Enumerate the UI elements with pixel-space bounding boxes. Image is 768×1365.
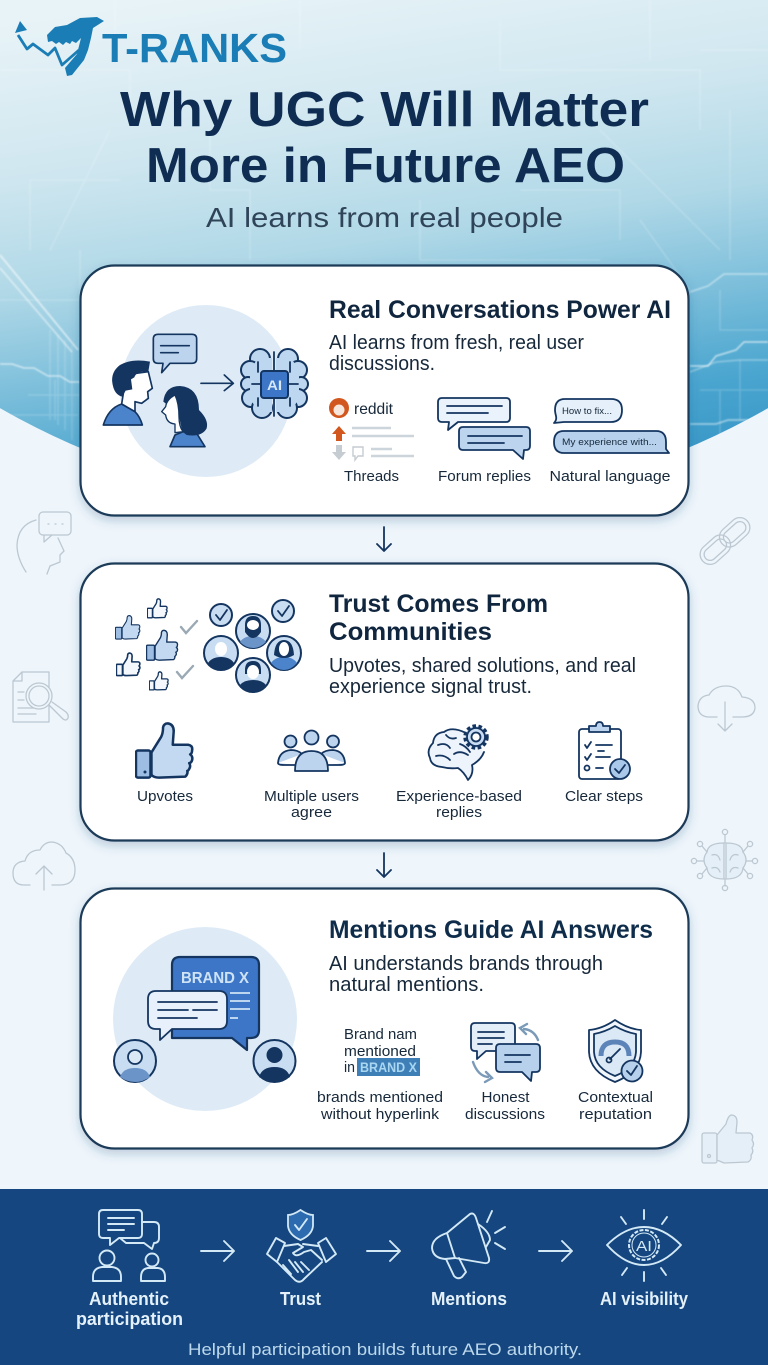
illustration: brand conversation: BRAND X xyxy=(181,970,249,987)
description xyxy=(329,332,584,375)
item: brands without hyperlink: in xyxy=(344,1060,355,1076)
panel: mentions xyxy=(80,888,688,1148)
item: multiple users agree: Multiple users xyxy=(264,789,359,805)
item: brands without hyperlink: BRAND X xyxy=(360,1059,418,1075)
illustration: thumbs cluster xyxy=(115,599,197,690)
item: natural language xyxy=(550,399,670,485)
arrow xyxy=(377,853,391,877)
item: honest discussions: discussions xyxy=(465,1107,545,1123)
item: contextual reputation: reputation xyxy=(579,1107,652,1123)
icon: AI brain: AI xyxy=(267,377,282,393)
item: contextual reputation xyxy=(578,1020,653,1123)
heading: Trust Comes From xyxy=(329,590,548,618)
footer band xyxy=(0,1189,768,1365)
icon: head with speech bubble xyxy=(17,512,71,574)
panel: trust xyxy=(80,564,688,840)
description: natural mentions. xyxy=(329,974,484,996)
heading xyxy=(329,590,548,646)
icon: document with magnifier xyxy=(13,672,68,722)
item: natural language: Natural language xyxy=(550,469,670,485)
item: experience-based replies xyxy=(396,726,522,821)
step: mentions: Mentions xyxy=(431,1289,507,1309)
item: clear steps xyxy=(565,722,643,805)
step: AI visibility: AI visibility xyxy=(600,1289,688,1309)
item: natural language: My experience with... xyxy=(562,437,657,448)
icon: cloud upload xyxy=(13,842,75,890)
heading: Mentions Guide AI Answers xyxy=(329,916,653,944)
arrow xyxy=(377,527,391,551)
decorative side icons xyxy=(13,512,758,1163)
step: mentions xyxy=(431,1211,507,1309)
description: discussions. xyxy=(329,353,435,375)
title xyxy=(120,83,649,193)
item: multiple users agree: agree xyxy=(291,805,332,821)
item: upvotes: Upvotes xyxy=(137,789,193,805)
icon: AI brain xyxy=(241,349,308,418)
item: brands without hyperlink: brands mentioned xyxy=(317,1090,443,1106)
arrow xyxy=(539,1241,572,1261)
step: AI visibility: AI xyxy=(636,1238,652,1255)
item: threads: reddit xyxy=(354,401,394,418)
item: experience-based replies: Experience-based xyxy=(396,789,522,805)
item: experience-based replies: replies xyxy=(436,805,482,821)
step: authentic participation xyxy=(76,1210,183,1329)
icon: cloud download xyxy=(698,686,755,731)
icon: network brain xyxy=(691,829,758,891)
description: experience signal trust. xyxy=(329,676,532,698)
item: multiple users agree xyxy=(264,730,359,821)
step: authentic participation: Authentic xyxy=(89,1289,169,1309)
item: threads: Threads xyxy=(344,469,399,485)
item: forum replies: Forum replies xyxy=(438,469,531,485)
step: trust xyxy=(267,1210,336,1309)
illustration: community avatars xyxy=(204,600,301,692)
step: AI visibility xyxy=(600,1210,688,1309)
item: brands without hyperlink xyxy=(317,1027,443,1123)
description xyxy=(329,655,636,698)
description: Upvotes, shared solutions, and real xyxy=(329,655,636,677)
item: contextual reputation: Contextual xyxy=(578,1090,653,1106)
item: forum replies xyxy=(438,398,531,485)
description: AI understands brands through xyxy=(329,953,603,975)
step: authentic participation: participation xyxy=(76,1309,183,1329)
item: brands without hyperlink: mentioned xyxy=(344,1044,416,1060)
hero background with circuit lines xyxy=(0,0,768,448)
icon: thumb up xyxy=(702,1115,754,1163)
arrow xyxy=(201,1241,234,1261)
illustration: people talking to AI xyxy=(103,305,308,477)
logo xyxy=(15,17,287,76)
panel: real conversations xyxy=(80,266,688,516)
item: upvotes xyxy=(136,723,193,805)
closing line: Helpful participation builds future AEO authority. xyxy=(188,1340,582,1359)
step: trust: Trust xyxy=(280,1289,321,1309)
description xyxy=(329,953,603,996)
item: honest discussions xyxy=(465,1023,545,1123)
item: brands without hyperlink: without hyperlink xyxy=(320,1107,440,1123)
item: honest discussions: Honest xyxy=(482,1090,530,1106)
title: Why UGC Will Matter xyxy=(120,83,649,137)
item: threads xyxy=(329,398,414,485)
title: More in Future AEO xyxy=(146,139,625,193)
heading: Communities xyxy=(329,618,492,646)
item: clear steps: Clear steps xyxy=(565,789,643,805)
arrow xyxy=(367,1241,400,1261)
item: brands without hyperlink: Brand nam xyxy=(344,1027,417,1043)
description: AI learns from fresh, real user xyxy=(329,332,584,354)
logo: T-RANKS xyxy=(102,25,287,71)
item: natural language: How to fix... xyxy=(562,406,612,417)
icon: chain link xyxy=(696,513,754,569)
heading: Real Conversations Power AI xyxy=(329,296,671,324)
illustration: brand conversation xyxy=(113,927,297,1111)
subtitle: AI learns from real people xyxy=(206,202,563,233)
